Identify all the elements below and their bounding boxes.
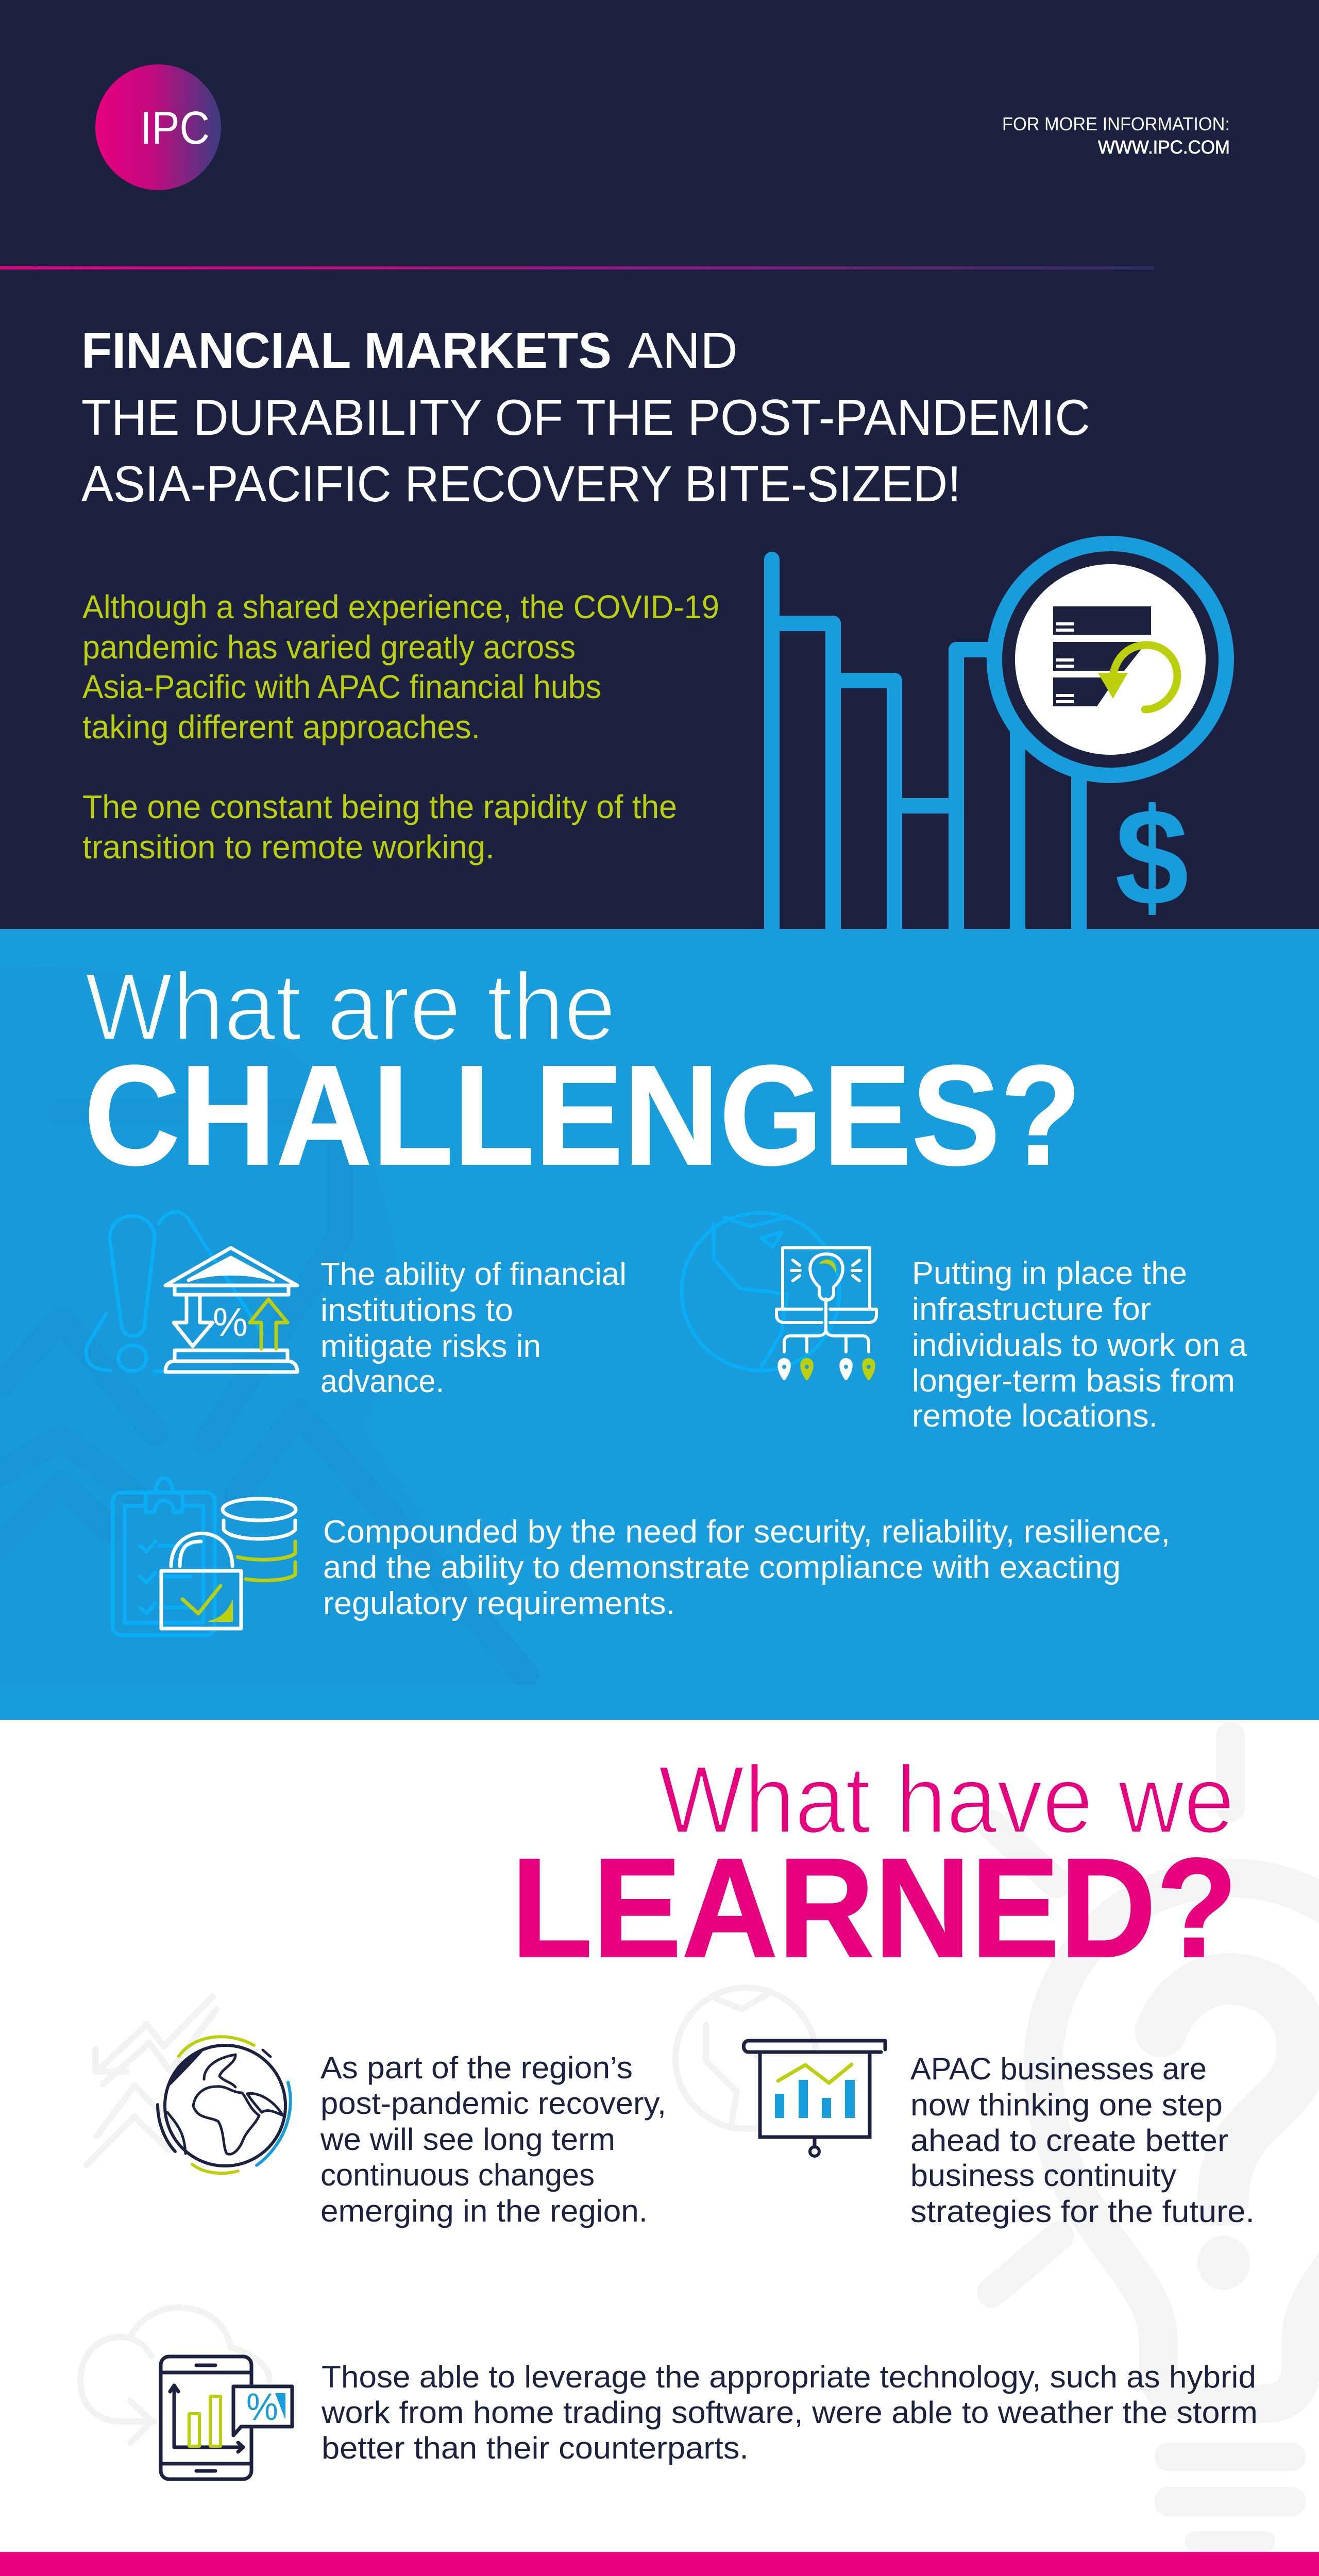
text: long term changes: post-pandemic recovery, [320, 2086, 666, 2121]
text: security and compliance: and the ability to demonstrate compliance with exacting [323, 1550, 1121, 1585]
text: business continuity [910, 2052, 1255, 2229]
panel: challenges [0, 929, 1319, 1720]
text: long term changes [320, 2050, 666, 2228]
text: business continuity: now thinking one step [910, 2088, 1223, 2122]
intro text [82, 588, 719, 866]
icon: bank with rate arrows: % [213, 1299, 248, 1345]
item: long term changes [158, 2037, 666, 2228]
intro text: taking different approaches. [82, 708, 480, 745]
text: remote infrastructure: longer-term basis from [912, 1363, 1235, 1399]
item: hybrid technology [161, 2357, 1258, 2479]
item: security and compliance [113, 1478, 1170, 1635]
icon: clipboard watermark [113, 1478, 215, 1635]
text: mitigate risks: mitigate risks in [320, 1329, 541, 1364]
title: THE DURABILITY OF THE POST-PANDEMIC [81, 389, 1090, 446]
title: FINANCIAL MARKETS [81, 322, 612, 379]
heading: what have we learned: What have we [658, 1747, 1235, 1853]
text: security and compliance: regulatory requirements. [323, 1586, 675, 1621]
text: remote infrastructure: remote locations. [912, 1398, 1158, 1434]
text: business continuity: strategies for the future. [910, 2194, 1255, 2229]
text: business continuity: APAC businesses are [910, 2052, 1207, 2086]
icon: phone with chart and percent bubble [161, 2357, 292, 2479]
intro text: Asia-Pacific with APAC financial hubs [82, 668, 601, 705]
heading: what are the challenges: What are the [85, 954, 616, 1060]
icon: lime refresh arrow [1098, 645, 1177, 709]
intro text: Although a shared experience, the COVID-19 [82, 588, 719, 625]
icon: presentation board with chart [743, 2041, 885, 2156]
icon: globe watermark [682, 1213, 839, 1370]
title: ASIA-PACIFIC RECOVERY BITE-SIZED! [81, 455, 961, 512]
heading: what are the challenges [84, 954, 1081, 1195]
heading: what are the challenges: CHALLENGES? [84, 1036, 1081, 1195]
icon: server stack [1053, 606, 1151, 706]
contact information: WWW.IPC.COM [1098, 137, 1230, 158]
icon: lightbulb on laptop with location pins [776, 1248, 876, 1379]
text: mitigate risks: advance. [320, 1364, 444, 1399]
intro text: transition to remote working. [82, 828, 495, 866]
panel: header [0, 0, 1319, 934]
text: long term changes: As part of the region’s [320, 2050, 633, 2085]
contact information [1002, 113, 1230, 158]
text: mitigate risks: institutions to [320, 1293, 513, 1328]
text: security and compliance [323, 1514, 1170, 1621]
icon: dollar sign: $ [1115, 779, 1189, 934]
text: remote infrastructure: individuals to work on a [912, 1328, 1247, 1363]
text: hybrid technology [321, 2360, 1258, 2465]
text: hybrid technology: better than their counterparts. [322, 2431, 749, 2465]
icon: phone with chart and percent bubble: % [246, 2385, 278, 2428]
panel: learned [0, 1720, 1319, 2552]
item: remote infrastructure [682, 1213, 1247, 1434]
text: mitigate risks [320, 1257, 627, 1399]
text: business continuity: ahead to create better [910, 2123, 1228, 2158]
logo: IPC: IPC [140, 103, 210, 154]
text: business continuity: business continuity [910, 2158, 1176, 2193]
text: remote infrastructure [912, 1256, 1247, 1434]
heading: what have we learned: LEARNED? [511, 1829, 1238, 1987]
icon: skyline with server magnifier and dollar sign [772, 544, 1226, 934]
item: business continuity [743, 2041, 1255, 2229]
text: mitigate risks: The ability of financial [320, 1257, 627, 1292]
title [81, 322, 1090, 512]
contact information: FOR MORE INFORMATION: [1002, 113, 1230, 134]
text: security and compliance: Compounded by the need for security, reliability, resilience, [323, 1514, 1170, 1550]
intro text: pandemic has varied greatly across [82, 629, 576, 666]
text: remote infrastructure: Putting in place the [912, 1256, 1187, 1291]
logo: IPC [95, 64, 221, 190]
text: long term changes: continuous changes [320, 2158, 595, 2192]
text: long term changes: we will see long term [320, 2122, 615, 2157]
heading: what have we learned [511, 1747, 1238, 1987]
text: hybrid technology: Those able to leverage the appropriate technology, such as hybrid [322, 2360, 1256, 2394]
item: mitigate risks [86, 1212, 627, 1399]
text: hybrid technology: work from home trading software, were able to weather the storm [321, 2395, 1258, 2430]
text: long term changes: emerging in the region. [320, 2194, 648, 2228]
icon: bank with rate arrows [165, 1248, 297, 1372]
icon: database and padlock [161, 1499, 296, 1629]
icon: exclamation mark watermark [86, 1212, 263, 1371]
intro text: The one constant being the rapidity of the [82, 788, 677, 825]
title: AND [628, 322, 738, 379]
panel: changes [0, 2552, 1319, 2576]
text: remote infrastructure: infrastructure for [912, 1292, 1151, 1327]
icon: earth with orbit arcs [158, 2037, 291, 2173]
